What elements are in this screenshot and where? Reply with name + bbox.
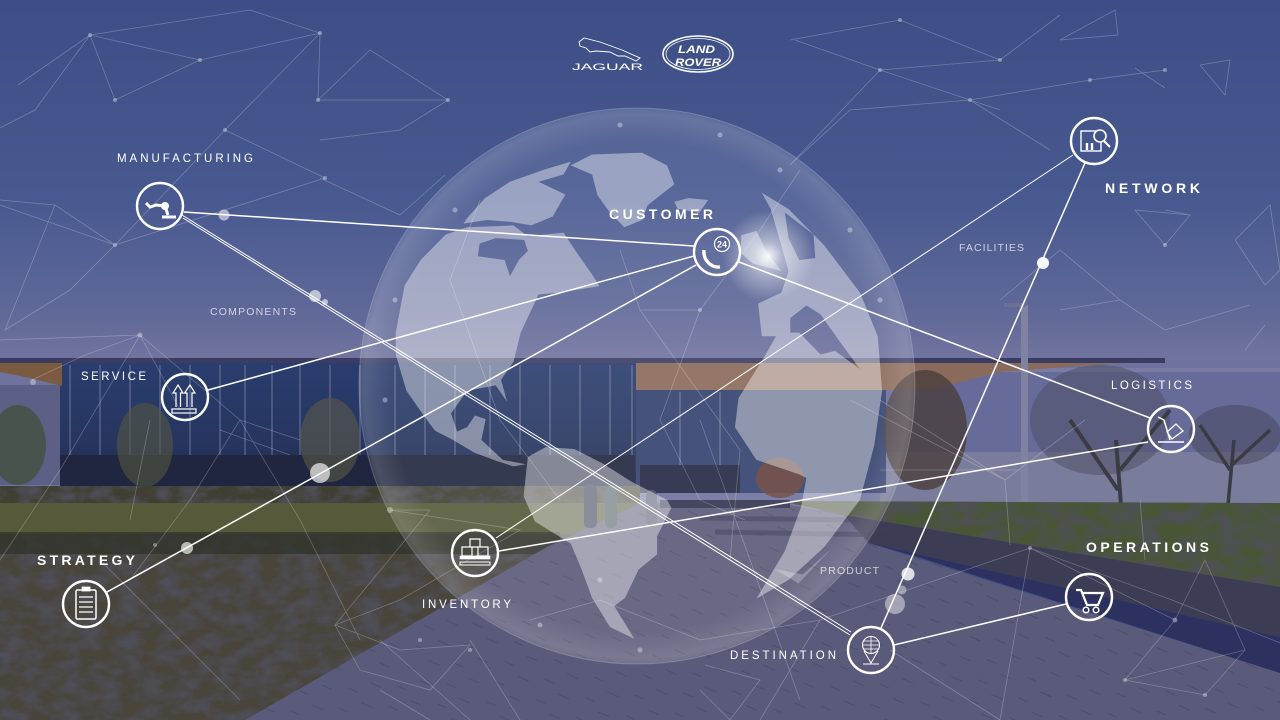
label: network: NETWORK — [1105, 180, 1200, 196]
icon: customer phone 24h — [694, 229, 740, 275]
icon: customer phone 24h: 24 — [717, 240, 727, 250]
label: strategy: STRATEGY — [37, 552, 136, 568]
globe highlight — [722, 210, 814, 302]
connection nodes — [181, 210, 1049, 614]
logo: Jaguar — [572, 38, 643, 73]
globe — [359, 108, 915, 664]
icon: operations shopping cart — [1066, 574, 1112, 620]
icon: network warehouse search — [1071, 118, 1117, 164]
icon: service this-way-up arrows — [162, 374, 208, 420]
label: operations: OPERATIONS — [1086, 539, 1209, 555]
connection lines between nodes — [107, 155, 1150, 645]
icon: inventory pallet boxes — [452, 530, 498, 576]
label: inventory: INVENTORY — [422, 599, 511, 611]
logo: Land Rover — [663, 36, 733, 72]
label: manufacturing: MANUFACTURING — [117, 153, 253, 165]
icon: manufacturing robot arm — [137, 183, 183, 229]
continents — [396, 153, 882, 639]
label: logistics: LOGISTICS — [1111, 380, 1192, 392]
label: destination: DESTINATION — [730, 650, 836, 662]
background: factory building and grounds — [0, 303, 1280, 720]
label: customer: CUSTOMER — [609, 206, 713, 222]
label: facilities: FACILITIES — [959, 242, 1024, 254]
logo: Land Rover: ROVER — [675, 57, 721, 69]
logo: Land Rover: LAND — [678, 44, 715, 56]
logo: Jaguar: JAGUAR — [572, 62, 643, 73]
background: sky — [0, 0, 1280, 365]
icon: logistics hand truck — [1148, 406, 1194, 452]
label: components: COMPONENTS — [210, 306, 296, 318]
label: product: PRODUCT — [820, 565, 880, 577]
icon: destination globe pin — [848, 627, 894, 673]
label: service: SERVICE — [81, 371, 146, 383]
people walking — [584, 484, 657, 528]
icon: strategy clipboard — [63, 581, 109, 627]
